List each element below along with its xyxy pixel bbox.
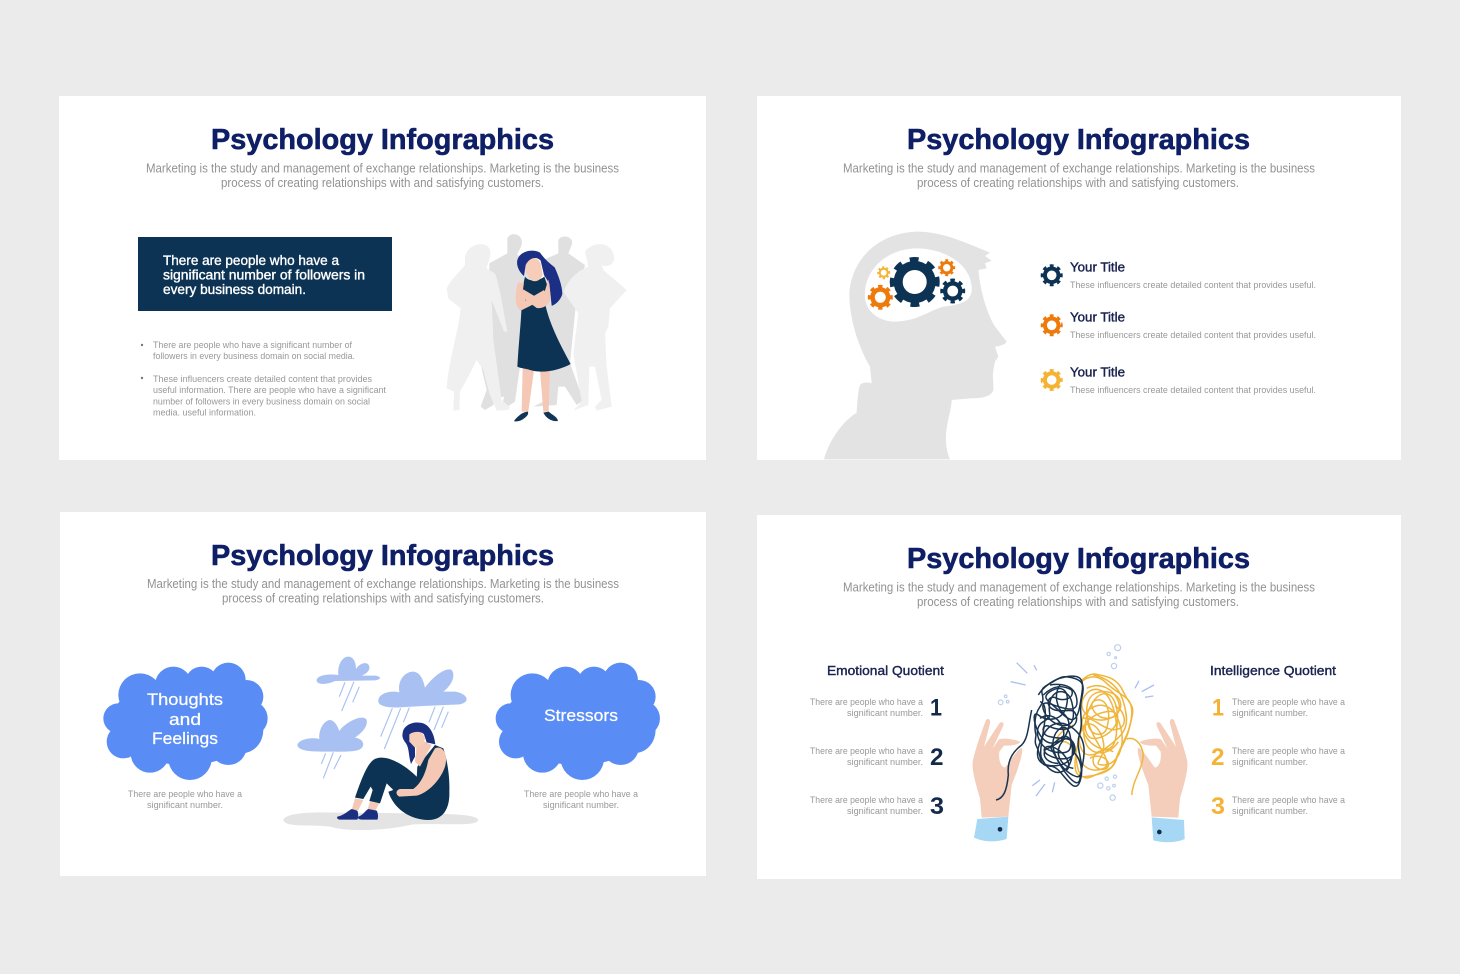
intelligence item 2	[1211, 744, 1346, 771]
caption: thoughts	[128, 789, 243, 811]
callout box	[138, 237, 392, 311]
icon: right navy gear	[940, 278, 966, 304]
list item 1: Your Title	[1070, 260, 1125, 275]
title: Psychology Infographics	[907, 543, 1250, 575]
bullet list: number of followers in every business domain on social	[153, 396, 370, 408]
subtitle	[146, 162, 619, 190]
emotional item 1: There are people who have a	[810, 697, 924, 708]
cloud: thoughts and feelings: Thoughts	[147, 690, 223, 709]
emotional item 3: There are people who have a	[810, 795, 924, 806]
subtitle	[147, 577, 619, 606]
list item 2	[1040, 310, 1316, 341]
intelligence item 3: There are people who have a	[1232, 795, 1346, 806]
bullet list: media. useful information.	[153, 408, 256, 418]
bullet list: useful information. There are people who have a significant	[153, 385, 386, 396]
subtitle: process of creating relationships with and satisfying customers.	[917, 595, 1239, 609]
heading: intelligence quotient: Intelligence Quotient	[1210, 663, 1336, 678]
intelligence item 1: There are people who have a	[1232, 697, 1346, 708]
intelligence item 2: There are people who have a	[1232, 746, 1346, 757]
panel: woman in crowd	[59, 96, 706, 460]
emotional item 3	[810, 793, 944, 820]
panel: head with gears	[757, 96, 1401, 460]
list item 3: These influencers create detailed content that provides useful.	[1070, 385, 1316, 396]
caption: stressors: significant number.	[543, 800, 619, 811]
emotional item 2: 2	[930, 744, 944, 771]
caption: thoughts: significant number.	[147, 800, 223, 811]
emotional item 3: 3	[930, 793, 944, 820]
subtitle	[843, 580, 1315, 609]
intelligence item 3: 3	[1211, 793, 1225, 820]
subtitle	[843, 162, 1315, 190]
icon: large navy gear	[888, 256, 941, 308]
caption: stressors	[524, 789, 639, 811]
list item 2: Your Title	[1070, 310, 1125, 325]
emotional item 2: significant number.	[847, 757, 923, 768]
emotional item 1: significant number.	[847, 708, 923, 719]
emotional item 2: There are people who have a	[810, 746, 924, 757]
illustration: hands untangling brain	[973, 645, 1187, 842]
bullet list: These influencers create detailed content that provides	[153, 374, 372, 385]
list item 1	[1040, 260, 1316, 291]
intelligence item 2: significant number.	[1232, 757, 1308, 768]
cloud: stressors	[496, 663, 660, 780]
subtitle: process of creating relationships with and satisfying customers.	[917, 176, 1239, 190]
emotional item 1: 1	[930, 694, 942, 722]
cloud: stressors: Stressors	[544, 706, 618, 725]
bullet list	[141, 340, 386, 418]
panel: thoughts and stressors	[60, 512, 706, 876]
intelligence item 2: 2	[1211, 744, 1224, 771]
subtitle: process of creating relationships with and satisfying customers.	[222, 592, 544, 606]
subtitle: Marketing is the study and management of exchange relationships. Marketing is the business	[147, 577, 619, 591]
bullet list: followers in every business domain on social media.	[153, 351, 355, 362]
subtitle: Marketing is the study and management of exchange relationships. Marketing is the business	[146, 162, 619, 176]
caption: stressors: There are people who have a	[524, 789, 639, 800]
intelligence item 1	[1212, 694, 1346, 722]
cloud: thoughts and feelings: and	[169, 710, 201, 729]
icon: left orange gear	[867, 284, 893, 310]
title: Psychology Infographics	[211, 124, 554, 156]
caption: thoughts: There are people who have a	[128, 789, 243, 800]
intelligence item 3	[1211, 793, 1346, 820]
callout box: There are people who have a	[163, 253, 339, 268]
bullet list: There are people who have a significant number of	[153, 340, 352, 351]
intelligence item 3: significant number.	[1232, 806, 1308, 817]
intelligence item 1: significant number.	[1232, 708, 1308, 719]
heading: emotional quotient: Emotional Quotient	[827, 663, 944, 678]
callout box: significant number of followers in	[163, 268, 365, 282]
emotional item 3: significant number.	[847, 806, 923, 817]
emotional item 1	[810, 694, 942, 722]
intelligence item 1: 1	[1212, 694, 1224, 722]
subtitle: Marketing is the study and management of exchange relationships. Marketing is the business	[843, 580, 1315, 594]
list item 2: These influencers create detailed content that provides useful.	[1070, 330, 1316, 341]
list item 3	[1040, 365, 1316, 396]
subtitle: process of creating relationships with and satisfying customers.	[221, 176, 544, 190]
icon: upper orange gear	[938, 259, 955, 276]
title: Psychology Infographics	[211, 540, 554, 572]
cloud: thoughts and feelings: Feelings	[152, 729, 218, 748]
cloud: thoughts and feelings	[103, 663, 268, 780]
illustration: woman in front of crowd silhouettes	[447, 234, 627, 421]
panel: emotional and intelligence quotient	[757, 515, 1401, 879]
title: Psychology Infographics	[907, 124, 1250, 156]
list item 1: These influencers create detailed content that provides useful.	[1070, 280, 1316, 291]
icon: small yellow gear	[877, 266, 890, 279]
illustration: sad woman under rain clouds	[283, 657, 478, 830]
callout box: every business domain.	[163, 282, 306, 297]
emotional item 2	[810, 744, 944, 771]
list item 3: Your Title	[1070, 365, 1125, 380]
illustration: head silhouette	[824, 232, 1007, 459]
subtitle: Marketing is the study and management of exchange relationships. Marketing is the business	[843, 162, 1315, 176]
